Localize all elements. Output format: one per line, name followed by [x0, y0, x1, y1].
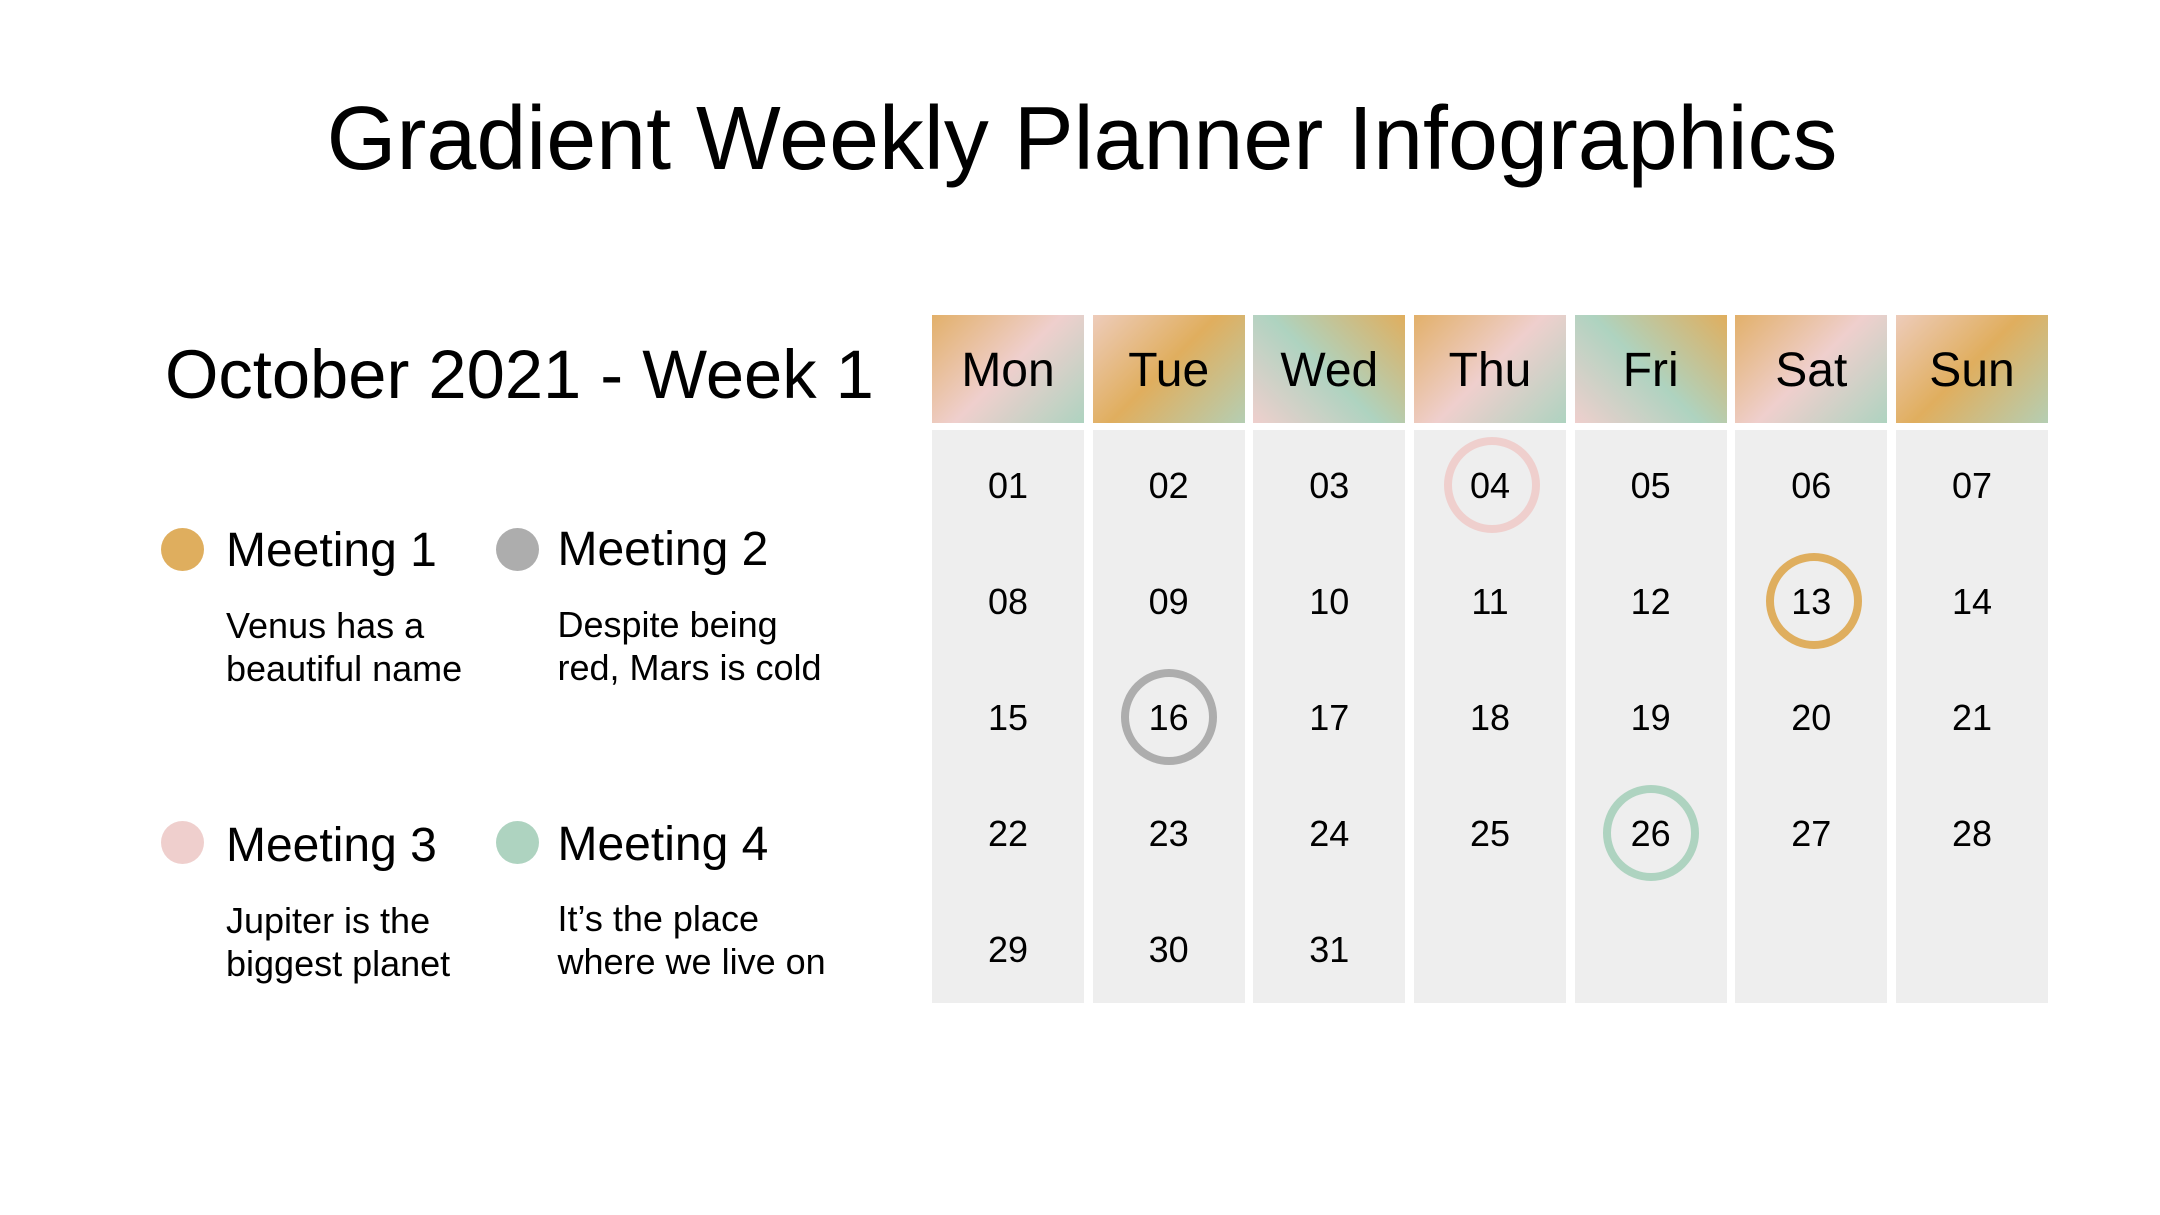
column: Wed [1253, 430, 1405, 1003]
text: meeting 1 description: Venus has a [226, 604, 424, 646]
highlight ring: 16 [1121, 668, 1217, 764]
column: Wed: 24 [1309, 813, 1349, 854]
column: Sun: 14 [1952, 581, 1992, 622]
legend item: meeting 1 [161, 524, 462, 689]
column: Thu: 04 [1470, 465, 1510, 506]
column: Mon [932, 430, 1084, 1003]
header: Wed: Wed [1280, 344, 1378, 396]
column: Wed: 17 [1309, 697, 1349, 738]
highlight ring: 13 [1766, 553, 1862, 649]
text: meeting 1 description: beautiful name [226, 648, 462, 689]
column: Wed: 03 [1309, 465, 1349, 506]
header: Tue: Tue [1128, 344, 1209, 396]
heading: meeting 1: Meeting 1 [226, 524, 437, 577]
header: Sun: Sun [1929, 344, 2015, 396]
panel: legend [161, 522, 826, 984]
column: Fri: 26 [1631, 813, 1671, 854]
column: Sat: 13 [1791, 581, 1831, 622]
heading: meeting 3: Meeting 3 [226, 819, 437, 872]
column: Fri: 19 [1631, 697, 1671, 738]
header: Thu [1414, 315, 1566, 423]
icon: meeting 2 dot [496, 528, 538, 571]
column: Fri [1575, 430, 1727, 1003]
column: Tue: 16 [1149, 697, 1189, 738]
text: meeting 3 description: biggest planet [226, 943, 450, 984]
icon: meeting 3 dot [161, 820, 204, 864]
text: meeting 4 description: It’s the place [558, 898, 759, 938]
legend item: meeting 2 [496, 522, 822, 688]
column: Tue [1093, 430, 1245, 1003]
heading: meeting 2: Meeting 2 [558, 522, 768, 576]
column: Mon: 22 [988, 813, 1028, 854]
column: Sun: 28 [1952, 813, 1992, 854]
column: Thu: 11 [1471, 581, 1509, 622]
column: Mon: 29 [988, 929, 1028, 970]
header: Fri [1575, 315, 1727, 423]
column: Sun: 07 [1952, 465, 1992, 506]
column: Fri: 05 [1631, 465, 1671, 506]
column: Fri: 12 [1631, 581, 1671, 622]
column: Tue: 09 [1149, 581, 1189, 622]
text: meeting 2 description: red, Mars is cold [558, 647, 822, 688]
text: meeting 2 description: Despite being [558, 604, 778, 644]
icon: meeting 4 dot [496, 820, 538, 864]
header: Mon: Mon [961, 344, 1055, 396]
header: Sat [1735, 315, 1887, 423]
column: Sun: 21 [1952, 697, 1992, 738]
column: Sat: 20 [1791, 697, 1831, 738]
text: meeting 3 description [226, 900, 450, 984]
legend item: meeting 3 [161, 819, 450, 984]
text: meeting 1 description [226, 604, 462, 689]
column: Mon: 08 [988, 581, 1028, 622]
column: Tue: 30 [1149, 929, 1189, 970]
column: Wed: 10 [1309, 581, 1349, 622]
text: meeting 2 description [558, 604, 822, 688]
column: Thu [1414, 430, 1566, 1003]
subtitle: month and week: October 2021 - Week 1 [165, 336, 874, 413]
legend item: meeting 4 [496, 818, 826, 982]
header: Sun [1896, 315, 2048, 423]
column: Wed: 31 [1309, 929, 1349, 970]
text: meeting 4 description: where we live on [558, 941, 826, 982]
text: meeting 3 description: Jupiter is the [226, 900, 430, 940]
highlight ring: 26 [1602, 784, 1698, 880]
header: Sat: Sat [1775, 344, 1847, 396]
column: Sun [1896, 430, 2048, 1003]
header: Wed [1253, 315, 1405, 423]
heading: meeting 4: Meeting 4 [558, 818, 768, 870]
header: Thu: Thu [1449, 344, 1531, 396]
header: Mon [932, 315, 1084, 423]
column: Thu: 25 [1470, 813, 1510, 854]
column: Mon: 01 [988, 465, 1028, 506]
highlight ring: 04 [1444, 437, 1540, 533]
column: Sat [1735, 430, 1887, 1003]
column: Sat: 06 [1791, 465, 1831, 506]
header: Tue [1093, 315, 1245, 423]
panel: calendar [932, 315, 2048, 1003]
column: Tue: 23 [1149, 813, 1189, 854]
column: Sat: 27 [1791, 813, 1831, 854]
column: Mon: 15 [988, 697, 1028, 738]
header: Fri: Fri [1623, 344, 1679, 396]
text: meeting 4 description [558, 898, 826, 982]
column: Thu: 18 [1470, 697, 1510, 738]
title: Gradient Weekly Planner Infographics [327, 89, 1837, 189]
icon: meeting 1 dot [161, 528, 204, 571]
column: Tue: 02 [1149, 465, 1189, 506]
